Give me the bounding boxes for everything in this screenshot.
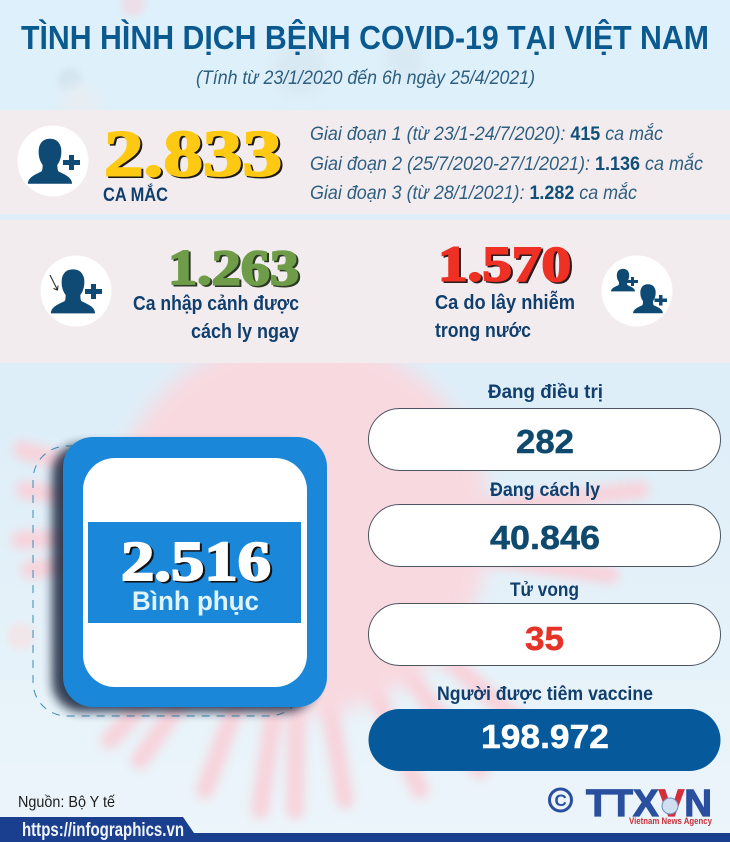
stat: deaths: Tử vong [510, 580, 579, 601]
recovered number: 2.516 [123, 532, 273, 594]
stat: under treatment [368, 382, 720, 470]
total cases number: 2.833 [106, 119, 284, 192]
stat: deaths [368, 580, 720, 666]
stat: deaths: 35 [525, 620, 564, 657]
total cases label: CA MẮC [103, 184, 168, 206]
phase breakdown: Giai đoạn 3 (từ 28/1/2021): 1.282 ca mắc [310, 183, 637, 204]
domestic cases number: 1.570 [438, 236, 571, 292]
panel: imported and domestic band [0, 220, 730, 363]
stat: under treatment: Đang điều trị [488, 382, 603, 403]
icon: new case person [18, 126, 88, 196]
subtitle: (Tính từ 23/1/2020 đến 6h ngày 25/4/2021) [196, 68, 535, 89]
icon: two persons [602, 256, 672, 326]
imported cases label: cách ly ngay [191, 321, 300, 343]
stat: under treatment: 282 [516, 423, 574, 460]
stat: in quarantine: 40.846 [490, 519, 600, 556]
source: Nguồn: Bộ Y tế [18, 794, 115, 811]
footer bar [0, 817, 730, 842]
domestic cases label: trong nước [435, 320, 531, 342]
phase breakdown [310, 124, 703, 204]
recovered number: 2.516 [121, 531, 271, 593]
stat: vaccinated [368, 684, 720, 771]
icon: imported case person [40, 256, 112, 326]
footer url: https://infographics.vn [22, 820, 184, 841]
imported cases label [133, 293, 300, 343]
total cases number: 2.833 [104, 118, 282, 190]
stat: vaccinated: 198.972 [481, 718, 609, 755]
domestic cases label [435, 290, 575, 342]
virus illustration [7, 335, 640, 810]
stat: vaccinated: Người được tiêm vaccine [437, 684, 653, 705]
phase breakdown: Giai đoạn 1 (từ 23/1-24/7/2020): 415 ca mắc [310, 124, 663, 145]
imported cases label: Ca nhập cảnh được [133, 293, 299, 315]
domestic cases label: Ca do lây nhiễm [435, 290, 575, 314]
panel: recovered card [33, 437, 327, 716]
imported cases number: 1.263 [168, 239, 299, 295]
logo: TTXVN: C [554, 791, 567, 810]
stat: in quarantine: Đang cách ly [490, 480, 600, 501]
stat: in quarantine [368, 480, 720, 566]
panel: total cases band [0, 110, 730, 214]
recovered label: Bình phục [132, 586, 259, 616]
imported cases number: 1.263 [170, 240, 301, 296]
domestic cases number: 1.570 [440, 237, 573, 293]
phase breakdown: Giai đoạn 2 (25/7/2020-27/1/2021): 1.136 ca mắc [310, 154, 703, 175]
logo: TTXVN: TTXVN [586, 783, 712, 825]
logo: TTXVN: Vietnam News Agency [629, 816, 712, 826]
